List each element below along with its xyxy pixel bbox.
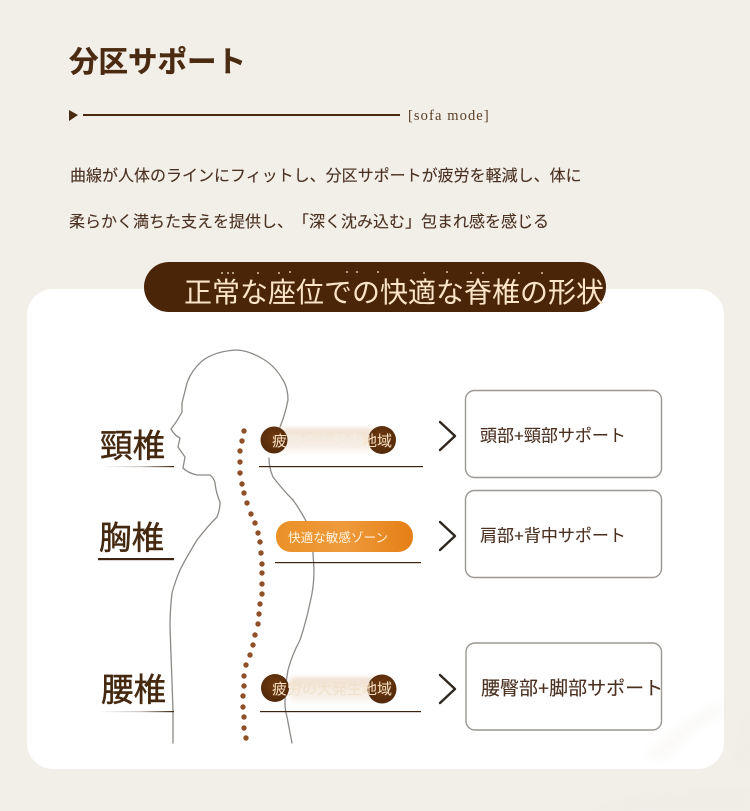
banner heading (144, 262, 606, 312)
panel: white card (27, 289, 724, 769)
decorative leaf watermark (590, 700, 750, 811)
arrow: head support (440, 422, 455, 450)
arrow: leg support (440, 675, 455, 703)
box: shoulder and back support (466, 490, 662, 578)
pill: lumbar fatigue zone: 疲労の大発生地域 (272, 681, 392, 698)
box: hip and leg support: 腰臀部+脚部サポート (481, 678, 663, 700)
banner heading: 正常な座位での快適な脊椎の形状 (184, 277, 604, 308)
label: cervical: 頸椎 (100, 428, 165, 464)
pill: neck fatigue zone: 疲労の大発生地域 (272, 433, 392, 450)
human silhouette outline (170, 350, 314, 743)
box: head and neck support: 頭部+頸部サポート (480, 426, 626, 446)
box: hip and leg support (466, 643, 663, 730)
rule: lumbar (260, 711, 421, 712)
description text: 柔らかく満ちた支えを提供し、「深く沈み込む」包まれ感を感じる (69, 213, 549, 231)
pill: comfort zone: 快適な敏感ゾーン (288, 530, 388, 545)
arrow: shoulder support (440, 522, 455, 550)
pill: comfort zone (276, 521, 413, 552)
label: thoracic: 胸椎 (99, 520, 164, 556)
box: shoulder and back support: 肩部+背中サポート (480, 526, 626, 546)
label: lumbar: 腰椎 (101, 672, 166, 708)
rule: back (275, 562, 421, 563)
spine dots (237, 428, 265, 741)
subtitle rule with sofa mode tag (69, 108, 490, 124)
title: 分区サポート (69, 46, 246, 79)
pill: lumbar fatigue zone (261, 674, 396, 704)
subtitle rule with sofa mode tag: [sofa mode] (408, 108, 490, 124)
box: head and neck support (466, 390, 662, 478)
description text: 曲線が人体のラインにフィットし、分区サポートが疲労を軽減し、体に (70, 167, 582, 185)
rule: neck (259, 466, 423, 467)
pill: neck fatigue zone (260, 426, 396, 454)
description text (69, 167, 582, 231)
